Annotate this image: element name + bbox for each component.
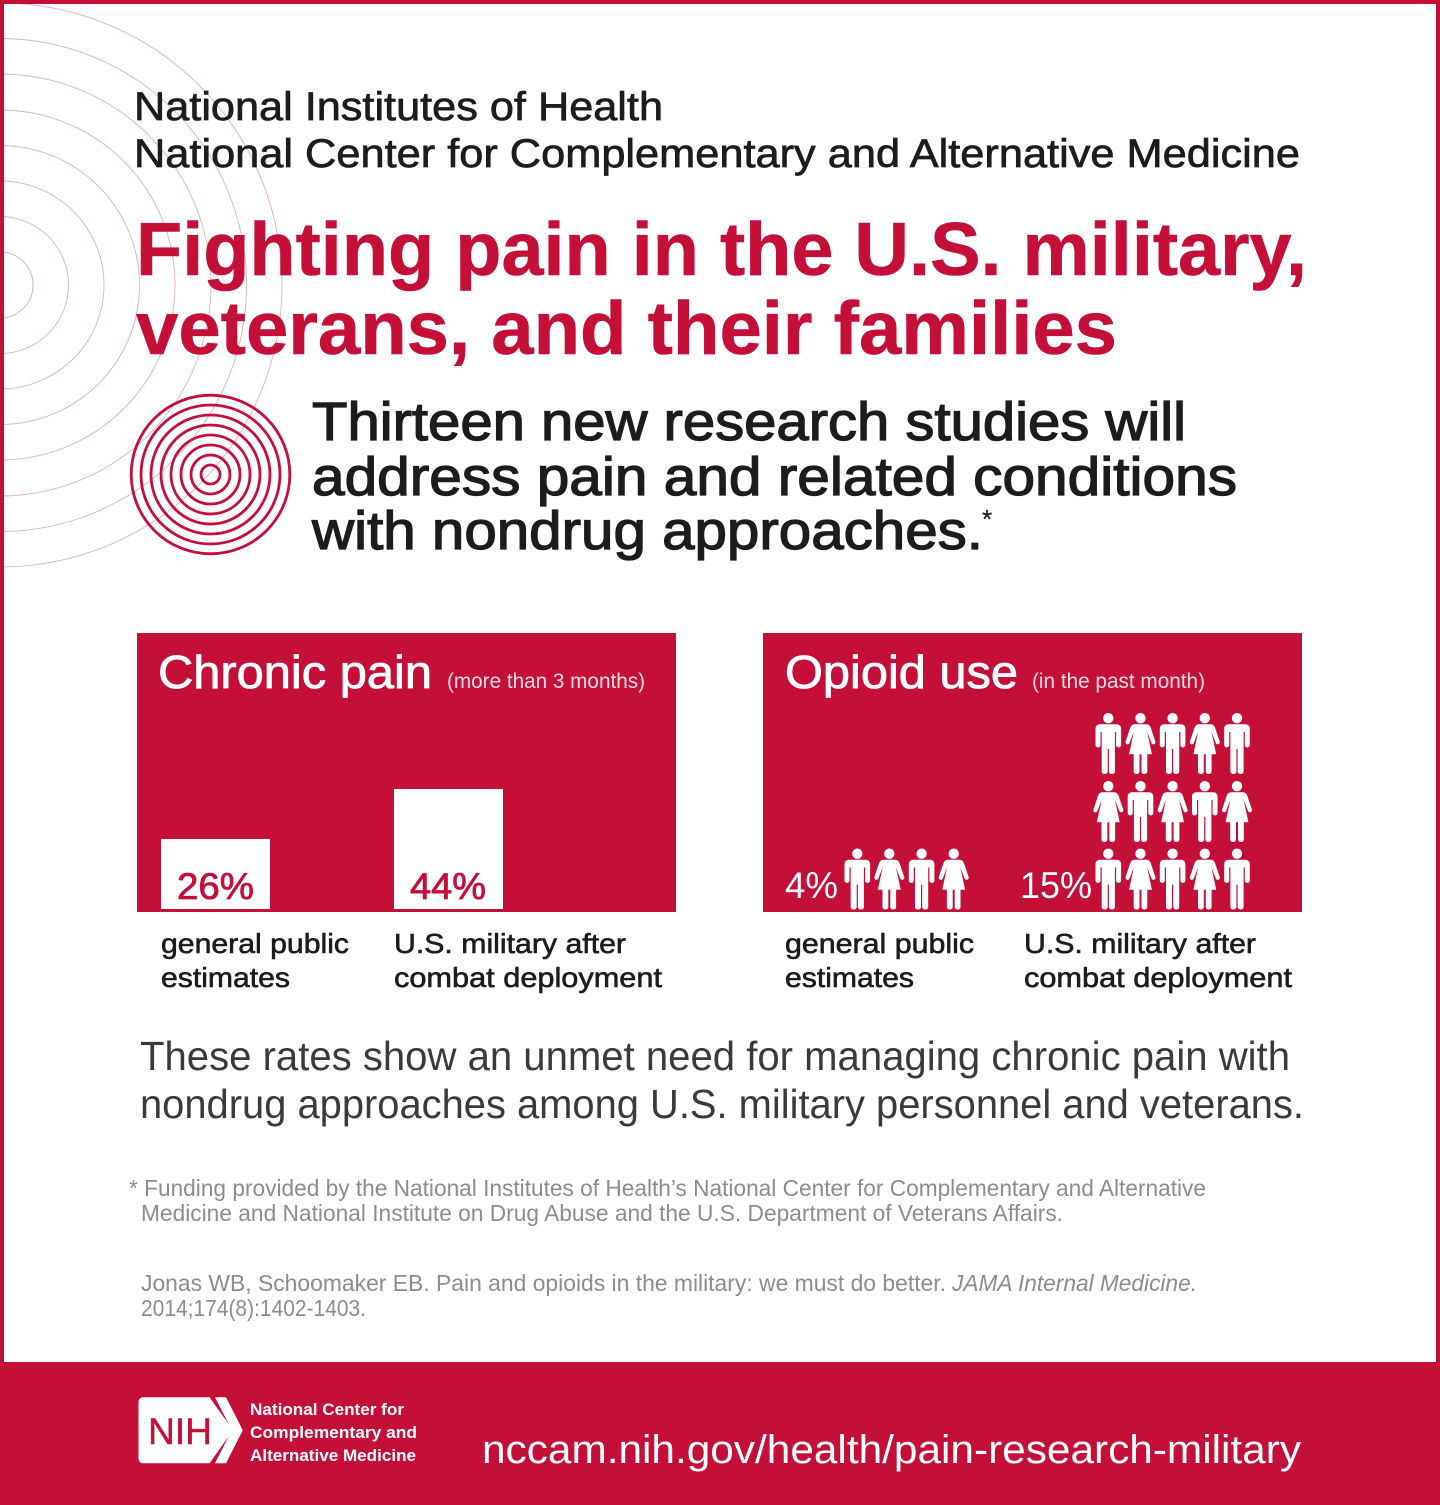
organization heading: National Center for Complementary and Alternative Medicine (134, 132, 1300, 176)
bar: general public: 26% (177, 866, 254, 907)
value: general public: 4% (785, 865, 838, 906)
title: Fighting pain in the U.S. military, (136, 207, 1307, 291)
label: opioid military: U.S. military after (1024, 928, 1256, 959)
conclusion text (140, 1033, 1304, 1127)
value: military: 15% (1020, 865, 1092, 906)
title (136, 207, 1307, 370)
icon: NIH logo: NIH (148, 1411, 212, 1452)
logo text: National Center for (250, 1400, 404, 1419)
label: opioid military: combat deployment (1024, 962, 1292, 993)
icon: NIH logo (138, 1397, 243, 1463)
logo text: Alternative Medicine (250, 1446, 416, 1465)
panel qualifier: (more than 3 months) (447, 670, 645, 693)
panel qualifier: (in the past month) (1032, 670, 1205, 693)
label: chronic pain general public: general public (161, 928, 349, 959)
panel: opioid use (763, 633, 1302, 912)
conclusion text: These rates show an unmet need for managing chronic pain with (140, 1033, 1290, 1079)
bar: military (394, 789, 503, 909)
panel heading: Opioid use (785, 646, 1018, 698)
label: opioid military (1024, 928, 1292, 993)
label: opioid general public: estimates (785, 962, 914, 993)
subtitle: with nondrug approaches. (311, 501, 983, 561)
subtitle: address pain and related conditions (312, 447, 1237, 507)
subtitle: * (982, 504, 992, 534)
label: opioid general public (785, 928, 974, 993)
subtitle (311, 392, 1237, 561)
label: opioid general public: general public (785, 928, 974, 959)
bar: general public (161, 839, 270, 909)
logo text: Complementary and (250, 1423, 417, 1442)
label: chronic pain military: combat deployment (394, 962, 662, 993)
footer background (0, 1362, 1440, 1505)
title: veterans, and their families (136, 286, 1117, 370)
icon: target rings (131, 395, 290, 554)
footnote (129, 1175, 1206, 1226)
citation: JAMA Internal Medicine. (951, 1270, 1197, 1296)
organization heading: National Institutes of Health (134, 85, 663, 129)
label: chronic pain general public (161, 928, 349, 993)
panel heading: Chronic pain (158, 646, 432, 698)
label: chronic pain general public: estimates (161, 962, 290, 993)
logo text (250, 1400, 417, 1465)
pictogram: military (1093, 713, 1252, 910)
bar: military: 44% (410, 866, 486, 907)
website URL: nccam.nih.gov/health/pain-research-military (482, 1428, 1301, 1472)
label: chronic pain military: U.S. military after (394, 928, 626, 959)
panel: chronic pain (137, 633, 676, 912)
footnote: Medicine and National Institute on Drug Abuse and the U.S. Department of Veterans Affairs. (141, 1200, 1063, 1226)
decorative radiating pain rings (0, 3, 282, 567)
citation (141, 1270, 1197, 1321)
footer band (0, 1362, 1440, 1505)
citation: Jonas WB, Schoomaker EB. Pain and opioids in the military: we must do better. (141, 1270, 946, 1296)
panel background (137, 633, 676, 912)
subtitle: Thirteen new research studies will (312, 392, 1186, 452)
panel background (763, 633, 1302, 912)
organization heading (134, 85, 1300, 176)
conclusion text: nondrug approaches among U.S. military personnel and veterans. (140, 1081, 1304, 1127)
pictogram: general public (844, 848, 969, 910)
footnote: * Funding provided by the National Institutes of Health’s National Center for Complementary and Alternative (129, 1175, 1206, 1201)
label: chronic pain military (394, 928, 662, 993)
citation: 2014;174(8):1402-1403. (141, 1295, 366, 1321)
